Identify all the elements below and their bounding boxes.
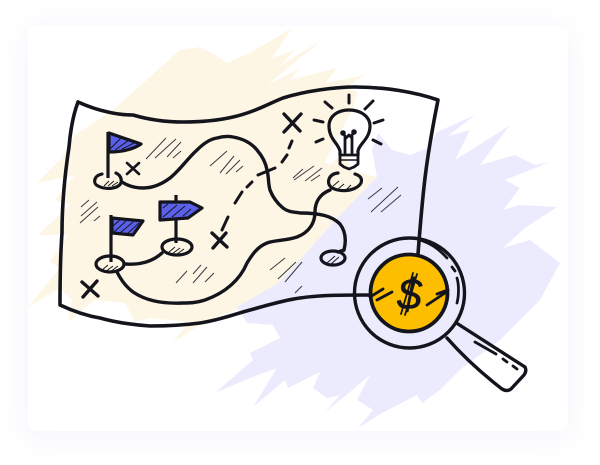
icon: light bulb <box>314 95 383 169</box>
dollar sign: $ <box>396 270 423 319</box>
cross marks <box>82 114 301 297</box>
route paths <box>117 136 345 303</box>
brush stroke: cream <box>28 28 377 342</box>
end marker ellipse <box>321 251 345 265</box>
bulb base ellipse <box>329 173 361 191</box>
handle <box>447 324 526 390</box>
flag: top left <box>95 132 141 188</box>
lens ring <box>354 238 464 348</box>
signpost <box>160 195 202 255</box>
lens glare and map-line crossings <box>370 240 458 305</box>
hatching marks <box>80 138 401 293</box>
magnifier with dollar coin <box>354 238 526 390</box>
map outline <box>60 87 438 326</box>
coin <box>370 254 448 332</box>
handle shine <box>475 342 517 369</box>
flag: lower left <box>96 215 143 272</box>
brush stroke: lavender <box>215 115 560 428</box>
second bar of the dollar sign <box>401 273 417 315</box>
